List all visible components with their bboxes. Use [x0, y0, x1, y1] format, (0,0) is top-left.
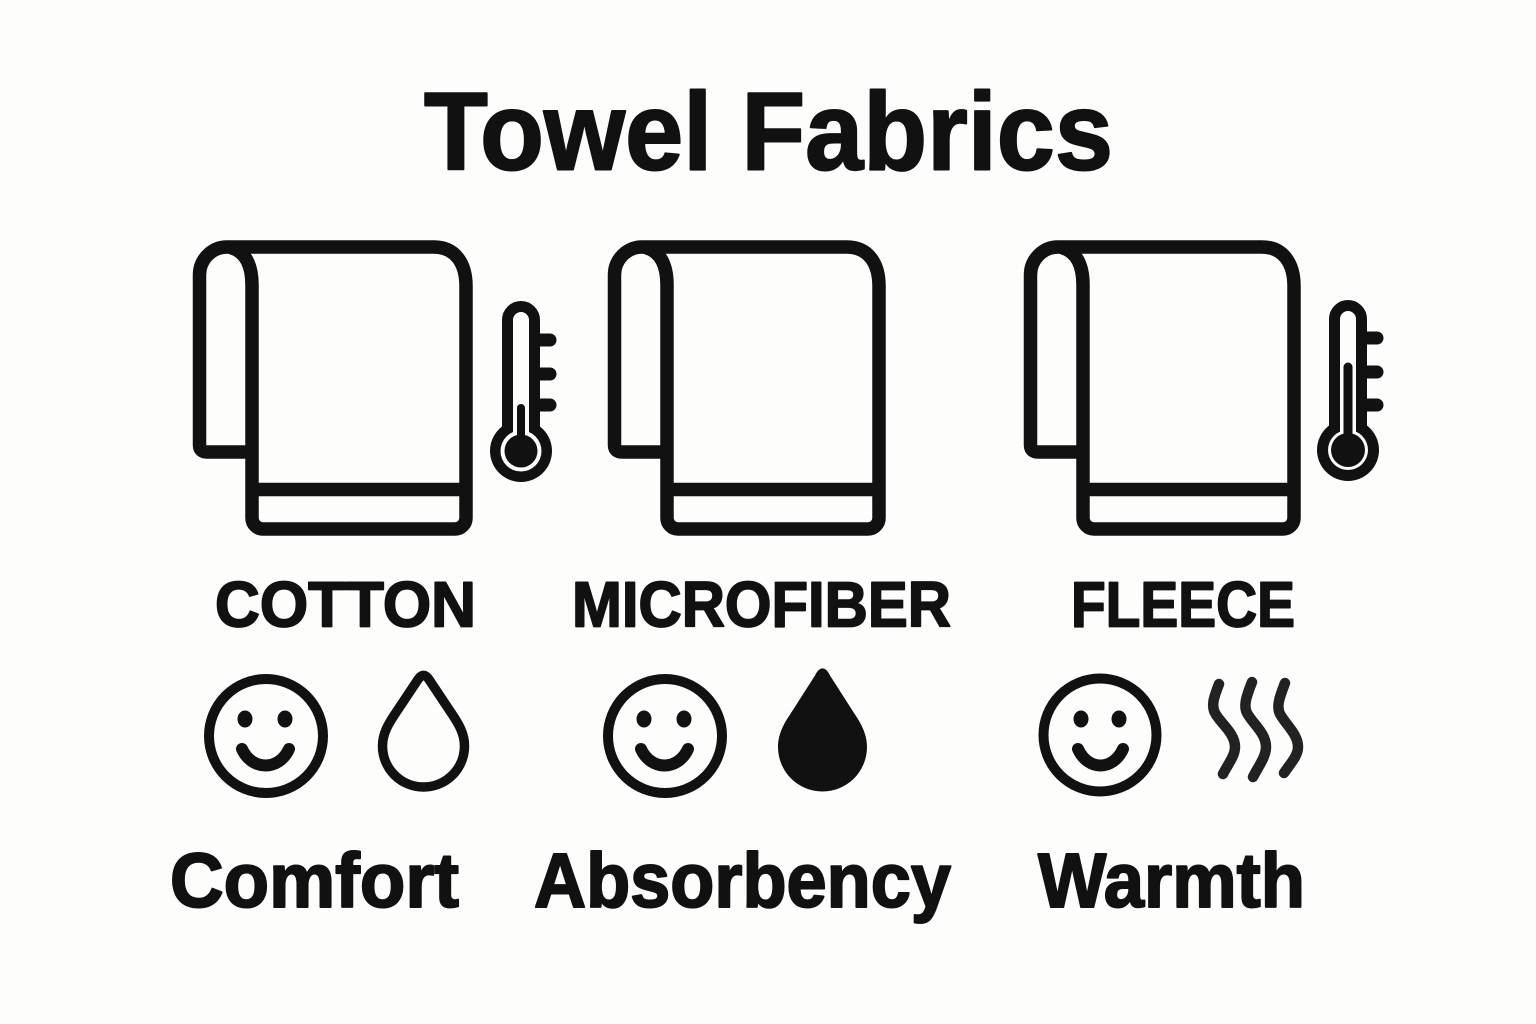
label: cotton: COTTON — [215, 568, 476, 640]
title: Towel Fabrics — [424, 70, 1113, 194]
icon: cotton towel — [200, 247, 466, 529]
icon: thermometer high — [1317, 306, 1379, 481]
label: comfort: Comfort — [170, 838, 459, 924]
label: microfiber: MICROFIBER — [572, 568, 951, 640]
label: warmth: Warmth — [1038, 838, 1305, 924]
panel: cotton — [170, 247, 552, 924]
icon: heat waves — [1213, 682, 1298, 777]
icon: fleece towel — [1030, 247, 1294, 529]
icon: smiley comfort — [608, 679, 722, 793]
panel: fleece — [1030, 247, 1379, 924]
icon: microfiber towel — [614, 247, 879, 529]
icon: thermometer low — [490, 306, 552, 482]
label: fleece: FLEECE — [1071, 568, 1295, 640]
icon: outlined water drop — [382, 675, 464, 787]
panel: microfiber — [534, 247, 951, 924]
icon: smiley comfort — [209, 679, 323, 793]
label: absorbency: Absorbency — [534, 838, 951, 924]
icon: smiley comfort — [1044, 678, 1156, 792]
icon: filled water drop — [778, 668, 867, 792]
